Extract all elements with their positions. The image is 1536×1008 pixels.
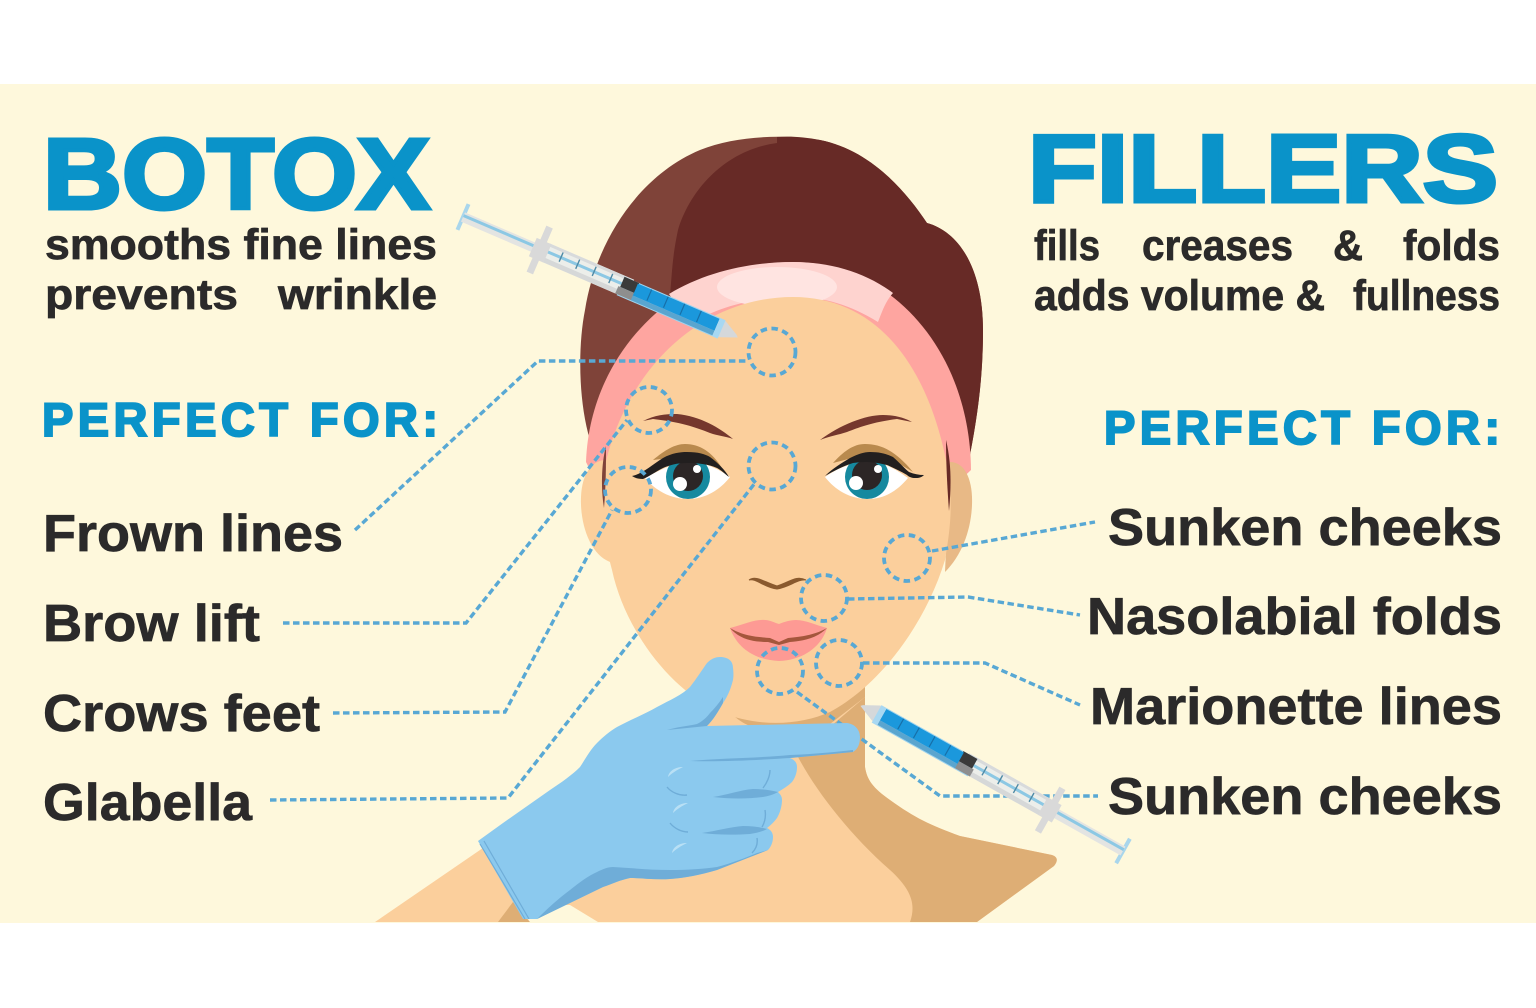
target circle: cheek — [884, 535, 930, 581]
Botox description — [45, 221, 437, 319]
left eye — [632, 444, 730, 499]
iris — [845, 455, 889, 499]
neck shadow — [797, 697, 1057, 922]
glove shadow: finger fold 3 — [702, 826, 767, 835]
pupil — [673, 461, 703, 491]
right ear — [945, 462, 972, 572]
shoulder shadow near glove — [498, 902, 530, 922]
connector: Sunken cheeks lower — [797, 692, 1098, 796]
label: Sunken cheeks lower: Sunken cheeks — [1108, 768, 1502, 826]
lip line — [730, 628, 827, 645]
Fillers description — [1034, 222, 1500, 320]
right eye — [825, 444, 924, 499]
pupil — [852, 460, 882, 490]
iris — [666, 455, 710, 499]
hair slivers by temples — [602, 446, 606, 508]
right eyebrow — [820, 415, 912, 440]
word: creases: creases — [1142, 222, 1293, 270]
line 2 word 2: wrinkle — [277, 271, 437, 319]
lips — [730, 620, 827, 661]
line 2 word 1: prevents — [45, 271, 238, 319]
eyeliner — [632, 452, 729, 479]
left eyebrow — [643, 414, 733, 439]
connector: Glabella — [270, 483, 755, 800]
hairband shine — [717, 267, 837, 307]
cream wedge under the glove — [525, 905, 598, 922]
knuckle glints — [668, 767, 688, 853]
connector: Sunken cheeks upper — [932, 522, 1095, 551]
label: Frown lines: Frown lines — [43, 505, 343, 563]
glove shadow: thumb fold — [667, 697, 723, 730]
target circle: glabella — [748, 442, 796, 490]
illustration: woman's face and neck — [375, 137, 1057, 922]
hairband — [586, 262, 971, 490]
connector: Marionette lines — [863, 663, 1080, 705]
label: Sunken cheeks upper: Sunken cheeks — [1108, 499, 1502, 557]
hairband highlight — [669, 262, 893, 325]
label: Brow lift: Brow lift — [43, 595, 260, 653]
hair dark — [670, 137, 983, 515]
target circle: nasolabial — [801, 575, 847, 621]
label: Glabella: Glabella — [43, 774, 253, 832]
words: adds volume &: adds volume & — [1034, 272, 1325, 320]
heading: FILLERS: FILLERS — [1028, 116, 1498, 222]
target circle: crow's feet — [605, 467, 651, 513]
syringe: top left — [451, 193, 748, 359]
heading: BOTOX: BOTOX — [43, 118, 430, 230]
target circle: chin — [757, 648, 803, 694]
subheading: left perfect for: PERFECT FOR: — [42, 393, 440, 446]
nose — [749, 578, 806, 589]
connector: Crows feet — [333, 510, 612, 713]
under chin shadow — [718, 685, 865, 728]
eye white — [825, 462, 908, 499]
connector: Frown lines — [355, 361, 748, 530]
eye white — [645, 462, 730, 499]
glove cuff edge — [480, 841, 529, 919]
word: folds: folds — [1403, 222, 1500, 270]
label: Marionette lines: Marionette lines — [1090, 678, 1502, 736]
eyeliner — [825, 452, 924, 478]
target circle: marionette — [816, 640, 862, 686]
connector: Brow lift — [283, 420, 627, 623]
target circle: brow — [626, 387, 672, 433]
glove shadow: cuff fold — [537, 850, 768, 919]
glove — [478, 657, 860, 919]
label: Crows feet: Crows feet — [43, 685, 320, 743]
gloved hand — [478, 657, 860, 919]
left ear — [581, 460, 610, 562]
word: fullness: fullness — [1353, 272, 1500, 320]
word: fills: fills — [1034, 222, 1100, 270]
eye shadow — [833, 444, 913, 472]
neck and shoulders — [375, 697, 1057, 922]
glove shadow: index fold — [690, 750, 853, 761]
connector: Nasolabial folds — [848, 597, 1080, 615]
label: Nasolabial folds: Nasolabial folds — [1087, 588, 1502, 646]
line 1: smooths fine lines — [45, 221, 437, 269]
subheading: right perfect for: PERFECT FOR: — [1104, 401, 1502, 454]
syringe: lower right — [849, 682, 1137, 874]
glove shadow: finger fold 2 — [713, 789, 778, 798]
word: ampersand: & — [1333, 222, 1363, 270]
face — [602, 297, 951, 723]
hair base — [580, 137, 983, 500]
eye shadow — [653, 444, 722, 468]
knuckle creases — [667, 770, 770, 853]
target circle: forehead — [748, 328, 796, 376]
